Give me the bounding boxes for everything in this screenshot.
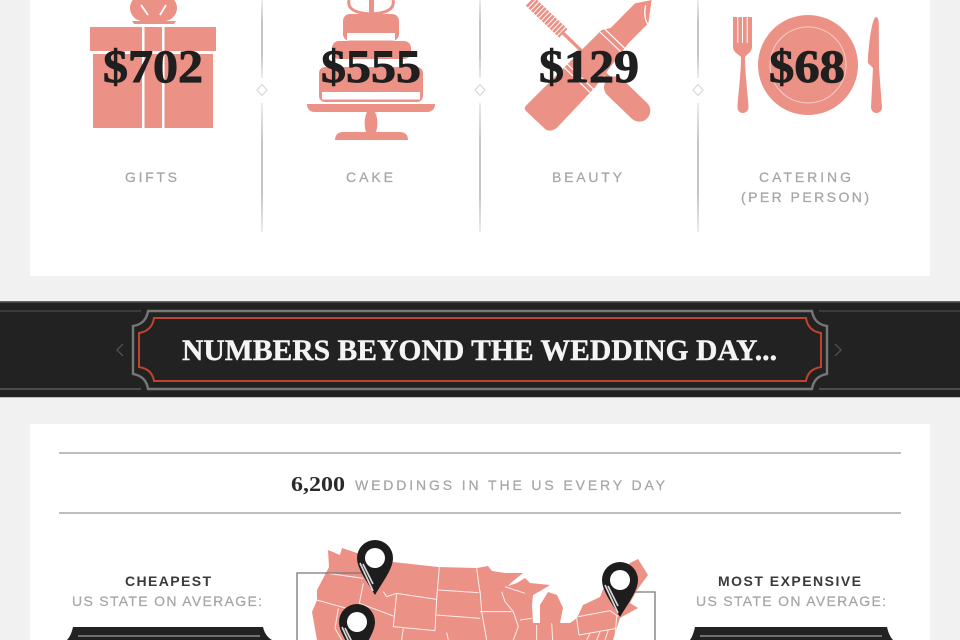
map pin: northwest xyxy=(357,540,393,595)
amount: cake: $555 xyxy=(321,41,421,93)
icon: lipstick and mascara xyxy=(525,0,652,131)
callout: most expensive state: US STATE ON AVERAGE: xyxy=(696,593,886,609)
icon: place setting xyxy=(733,15,882,115)
amount: beauty: $129 xyxy=(539,41,639,93)
chevrons xyxy=(117,344,841,356)
label: catering per person xyxy=(741,169,869,205)
amount: gifts: $702 xyxy=(103,41,203,93)
label: beauty: BEAUTY xyxy=(552,169,623,185)
statistic: weddings per day: 6,200 xyxy=(291,472,345,496)
plaque inner frame xyxy=(139,318,821,381)
icon: gift box xyxy=(90,0,216,128)
callout: cheapest state: CHEAPEST xyxy=(125,573,211,589)
banner title: NUMBERS BEYOND THE WEDDING DAY... xyxy=(182,334,777,367)
callout: cheapest state: US STATE ON AVERAGE: xyxy=(72,593,262,609)
callout: cheapest state xyxy=(67,573,272,640)
plaque frame xyxy=(133,311,827,389)
callout: most expensive state xyxy=(690,573,893,640)
panel: beyond the wedding day xyxy=(30,424,930,640)
statistic: weddings per day xyxy=(291,472,666,496)
icon: wedding cake xyxy=(307,0,435,140)
map pin: west xyxy=(339,604,375,640)
label: cake: CAKE xyxy=(346,169,393,185)
label: gifts: GIFTS xyxy=(125,169,177,185)
connector lines xyxy=(297,573,655,640)
section banner xyxy=(0,301,960,398)
amount: catering: $68 xyxy=(769,41,845,93)
panel: spending categories xyxy=(30,0,930,276)
label: catering per person: CATERING xyxy=(759,169,851,185)
map pin: northeast xyxy=(602,562,638,617)
US map xyxy=(312,548,648,640)
column dividers xyxy=(257,0,703,232)
callout: most expensive state: MOST EXPENSIVE xyxy=(718,573,861,589)
statistic: weddings per day: WEDDINGS IN THE US EVERY DAY xyxy=(355,477,666,493)
label: catering per person: (PER PERSON) xyxy=(741,189,869,205)
